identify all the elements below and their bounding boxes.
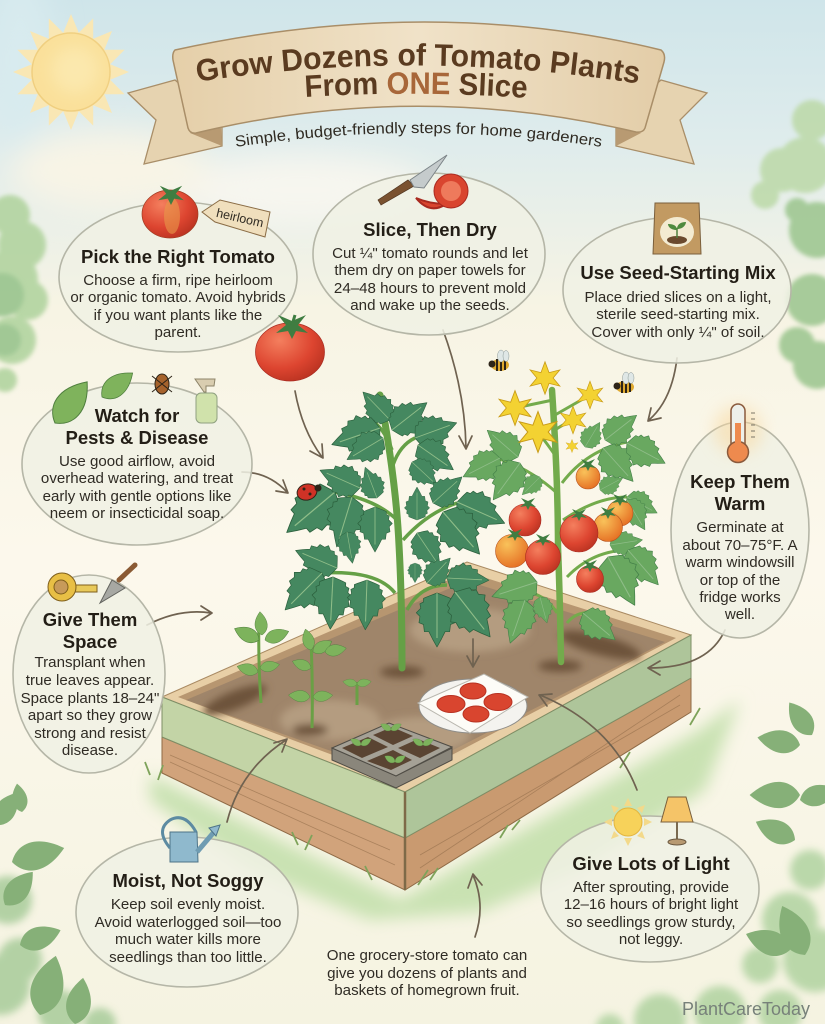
panel: moist not soggy: Keep soil evenly moist. (111, 896, 265, 913)
panel: keep them warm: fridge works (699, 589, 781, 606)
foliage: bottom left (0, 782, 116, 1024)
panel: pests and disease (22, 365, 252, 545)
panel: slice then dry: them dry on paper towels for (334, 262, 526, 279)
panel: give them space: Space (63, 631, 117, 652)
panel: pests and disease: early with gentle options like (43, 488, 231, 505)
upper green left (162, 697, 405, 838)
panel: slice then dry (313, 155, 545, 335)
ribbon tails (128, 80, 707, 164)
icon: heirloom tomato and tag: heirloom (215, 206, 265, 230)
panel: give lots of light: 12–16 hours of bright light (564, 896, 739, 913)
lower left board (162, 737, 405, 890)
lower right board (405, 678, 691, 890)
panel: give lots of light: Give Lots of Light (572, 853, 730, 874)
foliage: bottom right (596, 697, 825, 1024)
panel: seed-starting mix: Place dried slices on a light, (584, 289, 772, 306)
upper green right (405, 635, 691, 838)
closing note (327, 947, 527, 999)
panel: moist not soggy: seedlings than too little. (109, 949, 267, 966)
panel: pests and disease: overhead watering, and treat (41, 470, 234, 487)
panel: moist not soggy: much water kills more (115, 931, 261, 948)
watermark: PlantCareToday (682, 999, 810, 1019)
panel: seed-starting mix: Cover with only ¼" of soil. (591, 324, 765, 341)
panel: pests and disease: neem or insecticidal soap. (50, 505, 224, 522)
foliage: top left (0, 195, 48, 392)
panel: seed-starting mix: Use Seed-Starting Mix (580, 262, 776, 283)
panel: give them space: apart so they grow (28, 707, 152, 724)
panel: keep them warm: Keep Them (690, 471, 790, 492)
panel: give lots of light (541, 797, 759, 962)
panel: pests and disease: Use good airflow, avoid (59, 453, 215, 470)
panel: pick the right tomato: or organic tomato. Avoid hybrids (70, 289, 286, 306)
panel: keep them warm: Warm (715, 493, 765, 514)
raised bed (162, 562, 691, 890)
panel: give them space: Space plants 18–24" (21, 690, 159, 707)
sun (13, 14, 129, 130)
closing note: give you dozens of plants and (327, 965, 527, 982)
plant: big left tomato (271, 382, 513, 668)
plate of tomato slices (418, 674, 528, 733)
grass tufts (145, 708, 700, 885)
title banner: Grow Dozens of Tomato Plants (196, 43, 639, 83)
panel: pick the right tomato (59, 186, 297, 352)
inner walls (178, 572, 676, 781)
panel: keep them warm: Germinate at (696, 519, 784, 536)
panel: slice then dry: Cut ¼" tomato rounds and let (332, 245, 529, 262)
soil (186, 581, 665, 776)
icon: tape measure and trowel (48, 565, 135, 603)
icon: bee right (614, 372, 634, 393)
closing note: One grocery-store tomato can (327, 947, 527, 964)
panel: give lots of light: not leggy. (619, 931, 683, 948)
icon: thermometer (714, 404, 762, 462)
closing note: baskets of homegrown fruit. (334, 982, 520, 999)
panel: pests and disease: Watch for (95, 405, 179, 426)
foliage: top right (751, 100, 825, 389)
panel: slice then dry: and wake up the seeds. (350, 297, 510, 314)
panel: give them space: disease. (62, 742, 118, 759)
icon: bee left (488, 350, 509, 371)
panel: moist not soggy: Avoid waterlogged soil—too (95, 914, 281, 931)
scroll (173, 22, 665, 133)
panel: give them space: Transplant when (34, 654, 146, 671)
panel: keep them warm: about 70–75°F. A (682, 537, 799, 554)
plant: fruiting tomato (456, 362, 673, 662)
icon: knife and slices (378, 155, 468, 208)
panel: seed-starting mix (563, 203, 791, 363)
icon: leaves, beetle and spray bottle (44, 365, 217, 431)
panel: pick the right tomato: if you want plants like the (94, 307, 262, 324)
panel: pick the right tomato: parent. (154, 324, 202, 341)
title line 2 (305, 94, 527, 98)
panel: give them space: true leaves appear. (26, 672, 154, 689)
panel: give them space (13, 565, 165, 773)
panel: moist not soggy (76, 818, 298, 987)
panel: seed-starting mix: sterile seed-starting mix. (596, 306, 760, 323)
panel: slice then dry: Slice, Then Dry (363, 219, 498, 240)
subtitle: Simple, budget-friendly steps for home gardeners (236, 122, 602, 146)
panel: give lots of light: After sprouting, provide (573, 879, 729, 896)
icon: big tomato (256, 315, 324, 381)
panel: pests and disease: Pests & Disease (66, 427, 208, 448)
icon: watering can (162, 818, 220, 862)
title banner: From ONE Slice (306, 72, 526, 98)
panel: give lots of light: so seedlings grow sturdy, (566, 914, 736, 931)
panel: keep them warm: well. (724, 606, 755, 623)
seedlings (232, 611, 372, 728)
panel: slice then dry: 24–48 hours to prevent mold (334, 280, 526, 297)
icon: sun and lamp (604, 797, 693, 846)
panel: moist not soggy: Moist, Not Soggy (112, 870, 264, 891)
panel: keep them warm: warm windowsill (684, 554, 795, 571)
icon: ladybug (295, 482, 322, 502)
title banner (126, 21, 708, 165)
icon: heirloom tomato and tag (142, 186, 270, 238)
panel: keep them warm (671, 404, 809, 638)
panel: pick the right tomato: Pick the Right Tomato (81, 246, 275, 267)
grass wash (150, 700, 740, 920)
panel: pick the right tomato: Choose a firm, ripe heirloom (83, 272, 273, 289)
arrows (147, 330, 725, 937)
icon: soil bag (653, 203, 701, 254)
title line 1 (196, 65, 640, 84)
seed tray (332, 721, 452, 788)
panel: keep them warm: or top of the (700, 572, 780, 589)
panel: give them space: strong and resist (34, 725, 147, 742)
rim back (162, 562, 691, 792)
panel: give them space: Give Them (43, 609, 137, 630)
